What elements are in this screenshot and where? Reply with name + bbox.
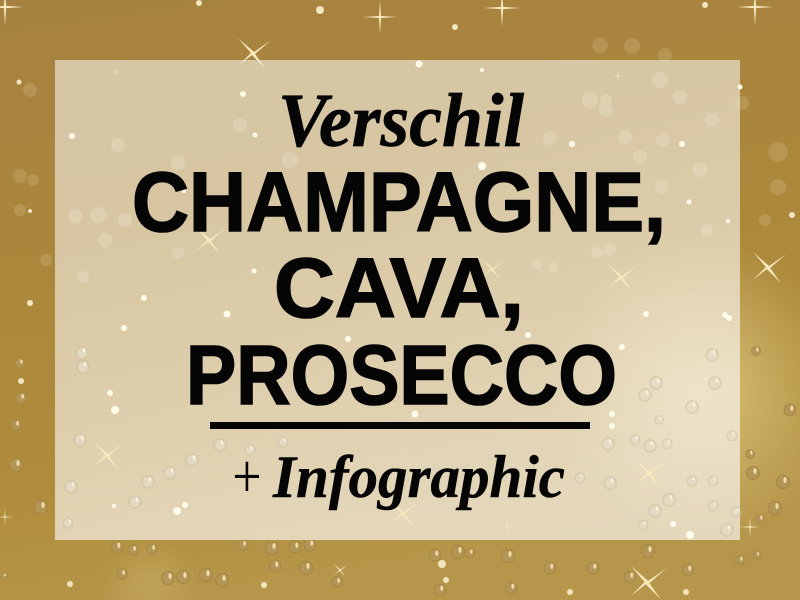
heading: Verschil: Verschil: [278, 79, 524, 163]
title: CHAMPAGNE, CAVA, PROSECCO: [132, 155, 666, 422]
title: CHAMPAGNE, CAVA, PROSECCO: CHAMPAGNE,: [132, 155, 666, 249]
title: CHAMPAGNE, CAVA, PROSECCO: PROSECCO: [186, 328, 617, 422]
title: CHAMPAGNE, CAVA, PROSECCO: CAVA,: [274, 241, 524, 335]
underline divider: [210, 422, 590, 429]
subtitle plus sign: +: [229, 443, 264, 511]
translucent text panel: [55, 60, 742, 540]
subtitle: Infographic: Infographic: [272, 444, 565, 510]
